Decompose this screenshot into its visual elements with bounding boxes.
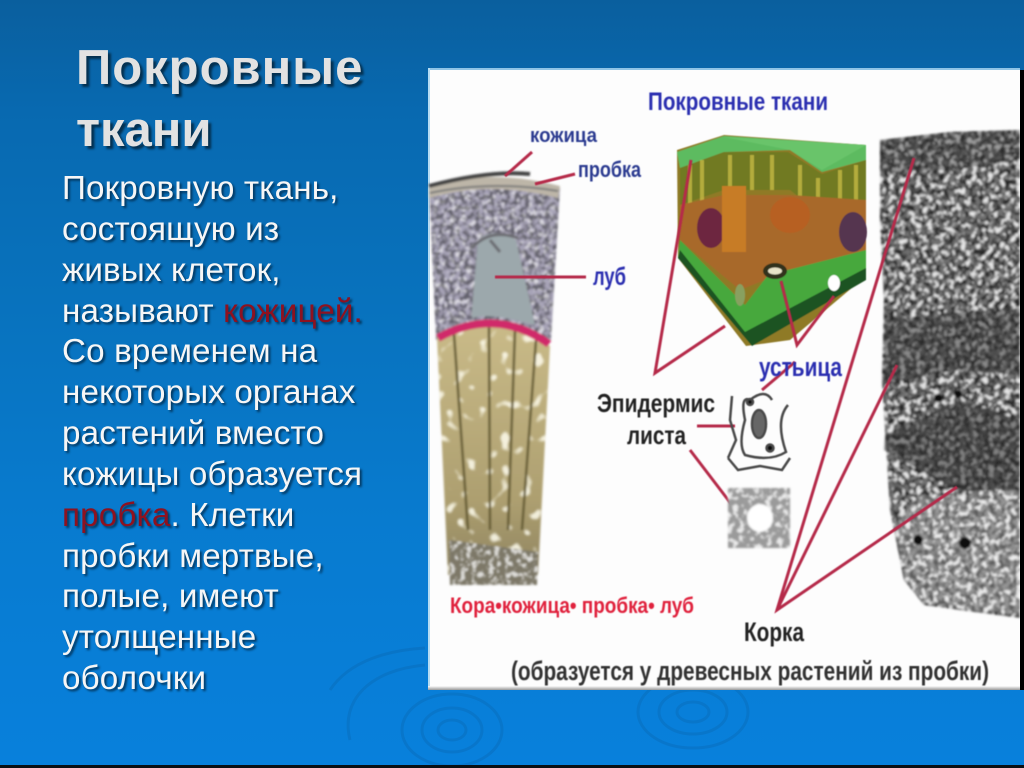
bottom edge strip <box>0 765 1024 768</box>
body text: растений вместо <box>62 415 324 452</box>
body text: Со временем на <box>62 333 317 370</box>
leader lines <box>495 152 957 610</box>
diagram labels: Эпидермис <box>597 388 715 418</box>
body text: утолщенные <box>62 619 256 656</box>
cork micrograph <box>880 130 1020 618</box>
diagram labels: пробка <box>578 157 642 182</box>
diagram labels: кожица <box>530 125 598 147</box>
right edge strip <box>1020 70 1024 690</box>
title <box>76 41 365 157</box>
stem cross-section <box>429 173 560 585</box>
title: Покровные <box>76 41 363 95</box>
body text: кожицы образуется <box>62 456 362 493</box>
body text: называют кожицей. <box>62 293 363 330</box>
cross-section cell block <box>728 488 790 548</box>
body text: пробки мертвые, <box>62 538 324 575</box>
diagram labels: луб <box>593 263 626 291</box>
body text: полые, имеют <box>62 578 279 615</box>
title: ткани <box>76 103 212 157</box>
diagram labels: Кора•кожица• пробка• луб <box>450 593 694 618</box>
epidermis cell drawings <box>728 394 790 470</box>
diagram labels: устьица <box>759 352 843 382</box>
body text: пробка. Клетки <box>62 497 294 534</box>
body text: оболочки <box>62 660 206 697</box>
body text <box>62 170 364 697</box>
diagram labels: листа <box>627 420 686 450</box>
diagram labels <box>450 88 989 686</box>
leaf block diagram <box>677 135 867 346</box>
body text: Покровную ткань, <box>62 170 339 207</box>
body text: некоторых органах <box>62 374 356 411</box>
body text: живых клеток, <box>62 252 281 289</box>
diagram labels: Корка <box>744 617 805 647</box>
diagram labels: Покровные ткани <box>648 88 828 116</box>
body text: состоящую из <box>62 211 279 248</box>
